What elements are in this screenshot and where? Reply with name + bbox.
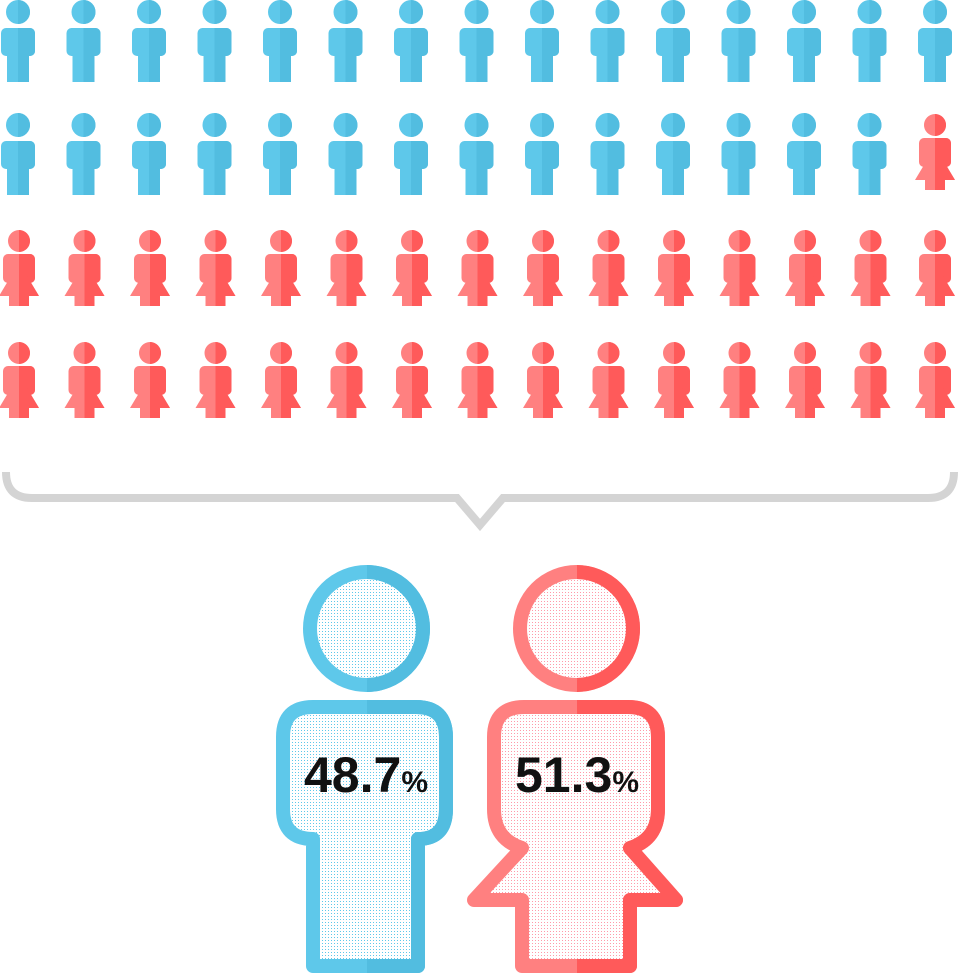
male percentage: 48.7%	[304, 747, 428, 803]
icon grid	[0, 0, 955, 418]
male body	[283, 707, 446, 966]
row 3: female icons	[0, 230, 955, 306]
row 2: male icons and one female	[1, 113, 955, 195]
row 1: male icons	[1, 0, 952, 82]
row 4: female icons	[0, 342, 955, 418]
panel: large male figure	[283, 572, 446, 966]
female body	[474, 707, 676, 966]
panel: large female figure	[474, 572, 676, 966]
female percentage: 51.3%	[515, 747, 639, 803]
brace pointer	[6, 472, 954, 525]
female head	[520, 572, 633, 685]
male head	[310, 572, 423, 685]
